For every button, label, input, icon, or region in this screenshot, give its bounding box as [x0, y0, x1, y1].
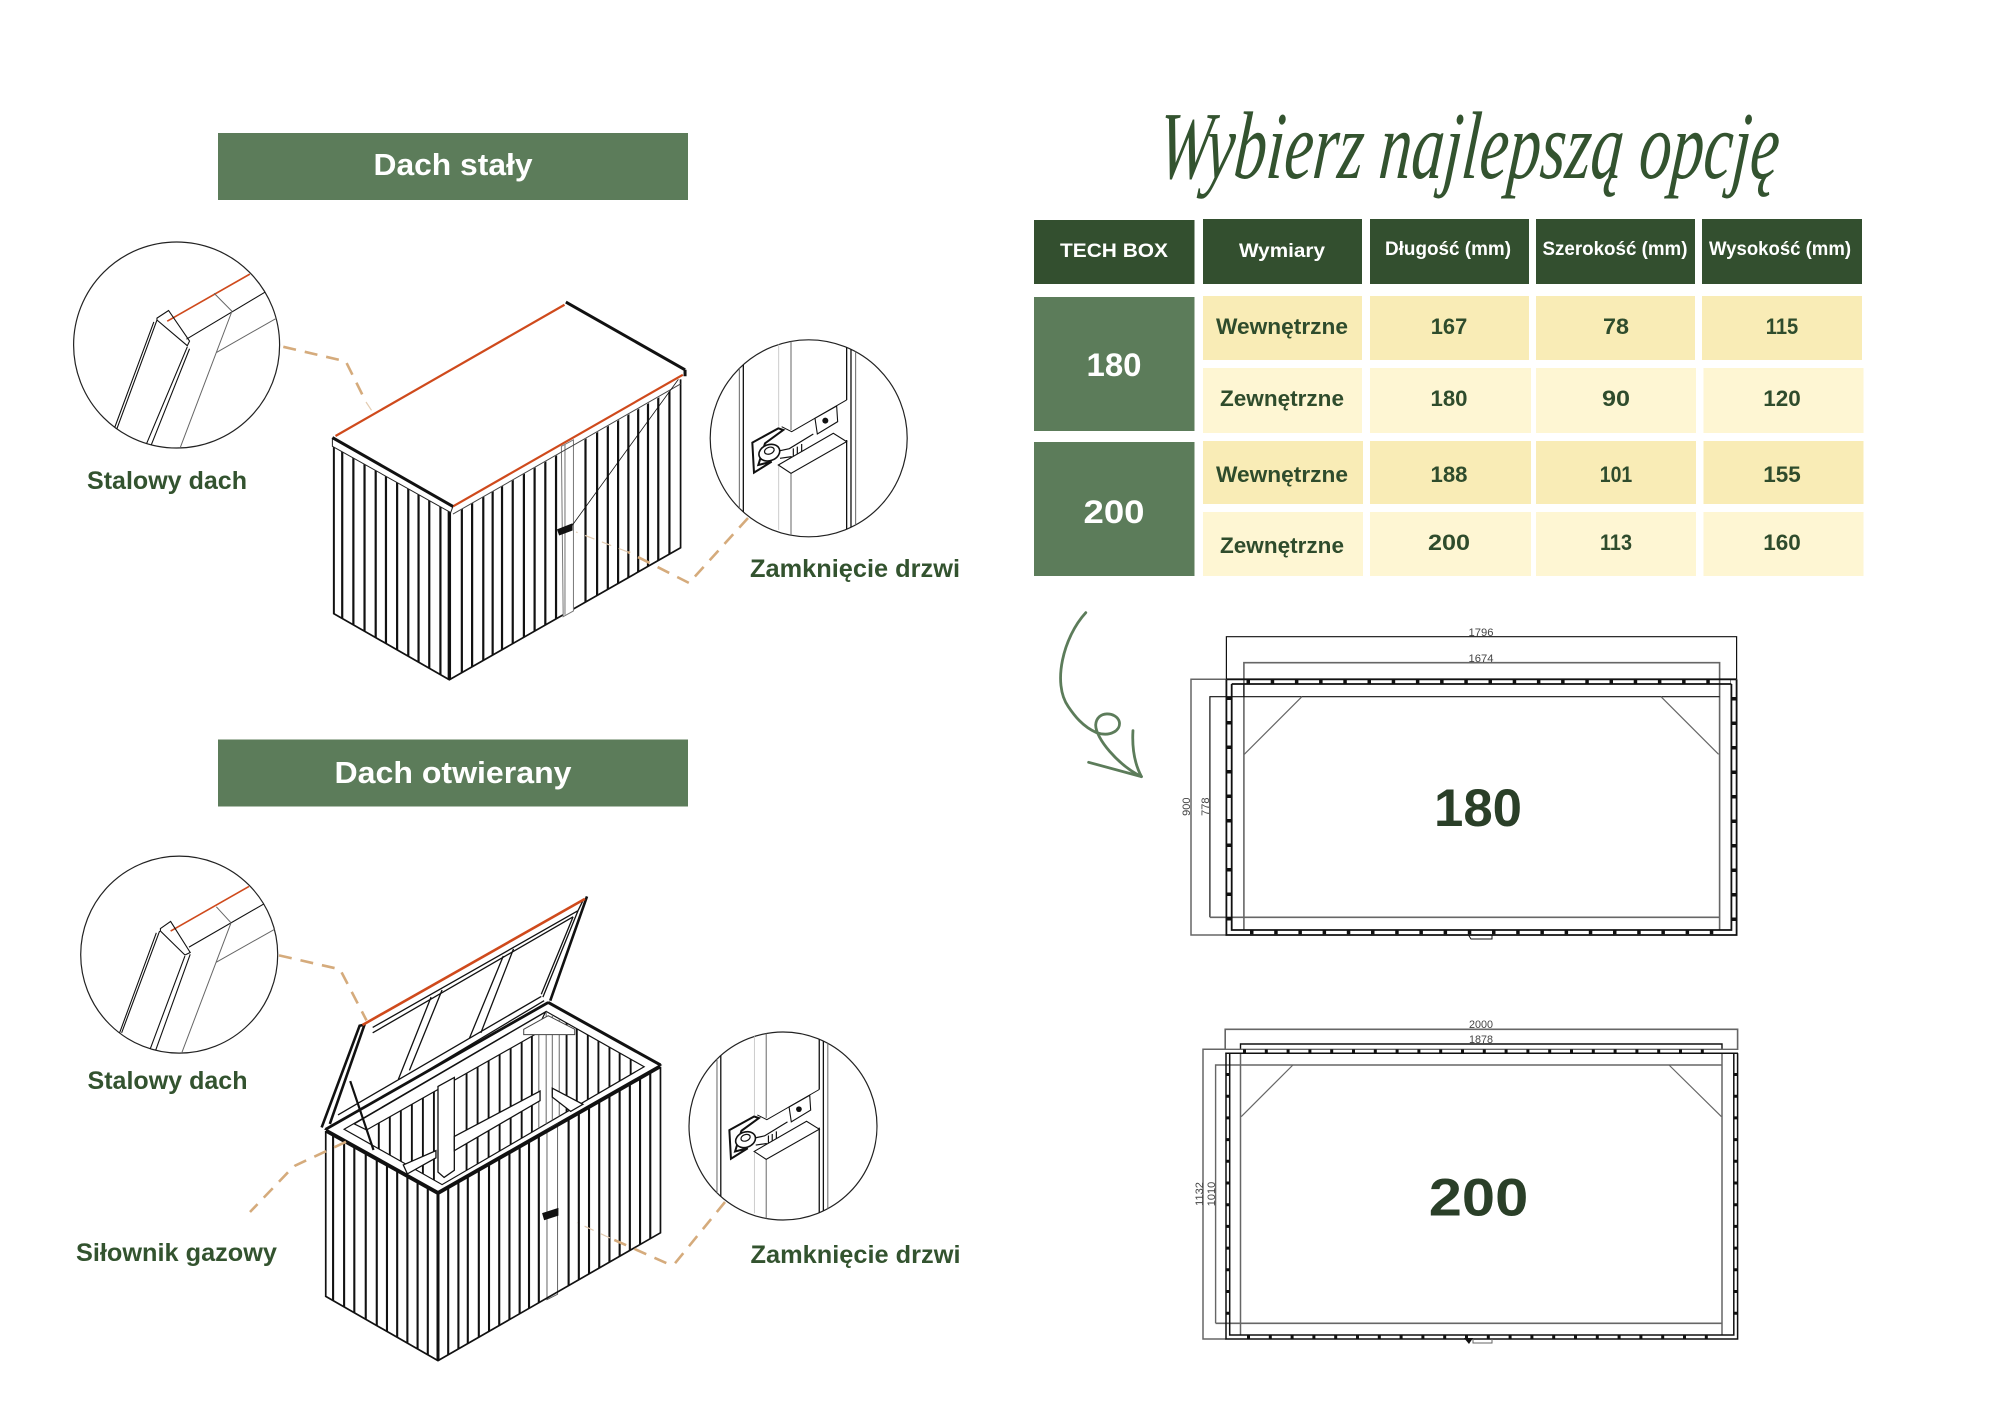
interior post and beams	[438, 1077, 454, 1177]
big label 200: 200	[1429, 1168, 1528, 1228]
dimension lines: 1878	[1469, 1034, 1493, 1046]
arrow: hand-drawn pointing to plans	[1061, 613, 1141, 777]
row: 180 wewnętrzne: Wewnętrzne	[1216, 314, 1348, 339]
outer walls	[1225, 1049, 1738, 1339]
leader line to opened roof	[279, 955, 366, 1020]
header row: Szerokość (mm)	[1542, 239, 1688, 260]
label: Siłownik gazowy: Siłownik gazowy	[76, 1239, 277, 1267]
row: 200 zewnętrzne: Zewnętrzne	[1220, 533, 1344, 558]
label: Zamknięcie drzwi: Zamknięcie drzwi	[750, 555, 960, 583]
dimension lines: 1010	[1206, 1182, 1218, 1206]
interior top strip	[354, 1012, 545, 1130]
header row: Wymiary	[1239, 241, 1325, 262]
header row: TECH BOX	[1060, 241, 1168, 262]
fascia under roof edge	[332, 439, 453, 513]
row: 200 zewnętrzne: 200	[1428, 530, 1470, 555]
floor plan: 200	[1194, 1019, 1738, 1344]
dimension lines: 778	[1200, 798, 1212, 816]
infographic canvas	[73, 111, 1864, 1362]
dimension lines: 900	[1181, 798, 1193, 816]
row: 180 zewnętrzne	[1203, 368, 1864, 433]
heading banner: Dach stały	[218, 133, 688, 200]
row: 180 zewnętrzne: 180	[1430, 386, 1468, 411]
gas strut	[350, 1081, 373, 1150]
header row: Wysokość (mm)	[1709, 239, 1851, 260]
callout circle: steel roof detail (opening)	[81, 856, 278, 1054]
row: 180 zewnętrzne: 90	[1602, 386, 1630, 411]
gusset	[524, 1016, 575, 1035]
label: Stalowy dach (opening): Stalowy dach	[88, 1067, 248, 1095]
door tab	[1468, 935, 1492, 939]
group: TECH BOX 200	[1034, 442, 1194, 576]
corner braces	[1241, 1065, 1722, 1117]
opened lid	[322, 895, 587, 1127]
row: 200 wewnętrzne: 101	[1600, 462, 1632, 487]
leader line to roof	[283, 347, 373, 412]
row: 180 zewnętrzne: Zewnętrzne	[1220, 386, 1344, 411]
label: Zamknięcie drzwi (opening): Zamknięcie drzwi	[750, 1241, 960, 1269]
corner braces	[1244, 697, 1719, 754]
row: 200 wewnętrzne: 155	[1763, 462, 1801, 487]
roof surface	[332, 302, 686, 508]
group: TECH BOX 200: 200	[1084, 494, 1144, 530]
callout circle: steel roof detail (fixed)	[74, 242, 280, 450]
heading banner: Dach stały: Dach stały	[374, 147, 533, 182]
leader line to gas strut	[250, 1142, 346, 1212]
hinge edge	[326, 1002, 548, 1129]
group: TECH BOX 180	[1034, 297, 1194, 431]
fascia line under front roof edge	[453, 384, 681, 514]
interior of box	[326, 1001, 660, 1197]
dimension lines: 2000	[1469, 1019, 1493, 1031]
callout circle: door latch detail (fixed)	[710, 337, 907, 540]
header row: Długość (mm)	[1385, 239, 1511, 260]
door tab	[1464, 1338, 1492, 1344]
header row	[1034, 219, 1862, 284]
walls with ribs	[326, 1002, 660, 1361]
row: 200 zewnętrzne	[1203, 512, 1864, 576]
row: 200 zewnętrzne: 160	[1763, 530, 1801, 555]
illustration: shed with opening roof	[322, 895, 660, 1361]
row: 180 wewnętrzne: 78	[1603, 314, 1629, 339]
leader line to latch (opening)	[577, 1202, 725, 1264]
outer walls	[1226, 679, 1737, 935]
row: 180 zewnętrzne: 120	[1763, 386, 1801, 411]
illustration: shed with fixed roof	[332, 302, 686, 682]
dimension lines: 1132	[1194, 1182, 1206, 1206]
callout circle: door latch detail (opening)	[689, 1029, 877, 1223]
leader line to latch	[576, 518, 748, 583]
door panel	[561, 440, 573, 617]
label: Stalowy dach: Stalowy dach	[87, 467, 247, 495]
black rims	[332, 302, 685, 506]
door strut line	[571, 379, 678, 527]
row: 200 wewnętrzne: 188	[1430, 462, 1468, 487]
floor plan: 180	[1181, 627, 1737, 939]
group: TECH BOX 180: 180	[1086, 347, 1142, 383]
row: 200 wewnętrzne	[1203, 441, 1864, 504]
door latch	[557, 523, 573, 536]
dimension lines: 1796	[1468, 627, 1494, 639]
dimension lines: 1674	[1468, 653, 1494, 665]
row: 180 wewnętrzne: 115	[1766, 314, 1798, 339]
row: 200 wewnętrzne: Wewnętrzne	[1216, 462, 1348, 487]
table: dimensions	[1034, 219, 1864, 576]
row: 200 zewnętrzne: 113	[1600, 530, 1632, 555]
row: 180 wewnętrzne: 167	[1431, 314, 1467, 339]
heading banner: Dach otwierany	[218, 740, 688, 806]
row: 180 wewnętrzne	[1203, 296, 1862, 360]
big label 180: 180	[1434, 779, 1522, 838]
dimension lines	[1194, 1019, 1738, 1339]
heading banner: Dach otwierany: Dach otwierany	[334, 755, 572, 790]
orange roof edges	[336, 305, 683, 506]
dimension lines	[1181, 627, 1737, 935]
